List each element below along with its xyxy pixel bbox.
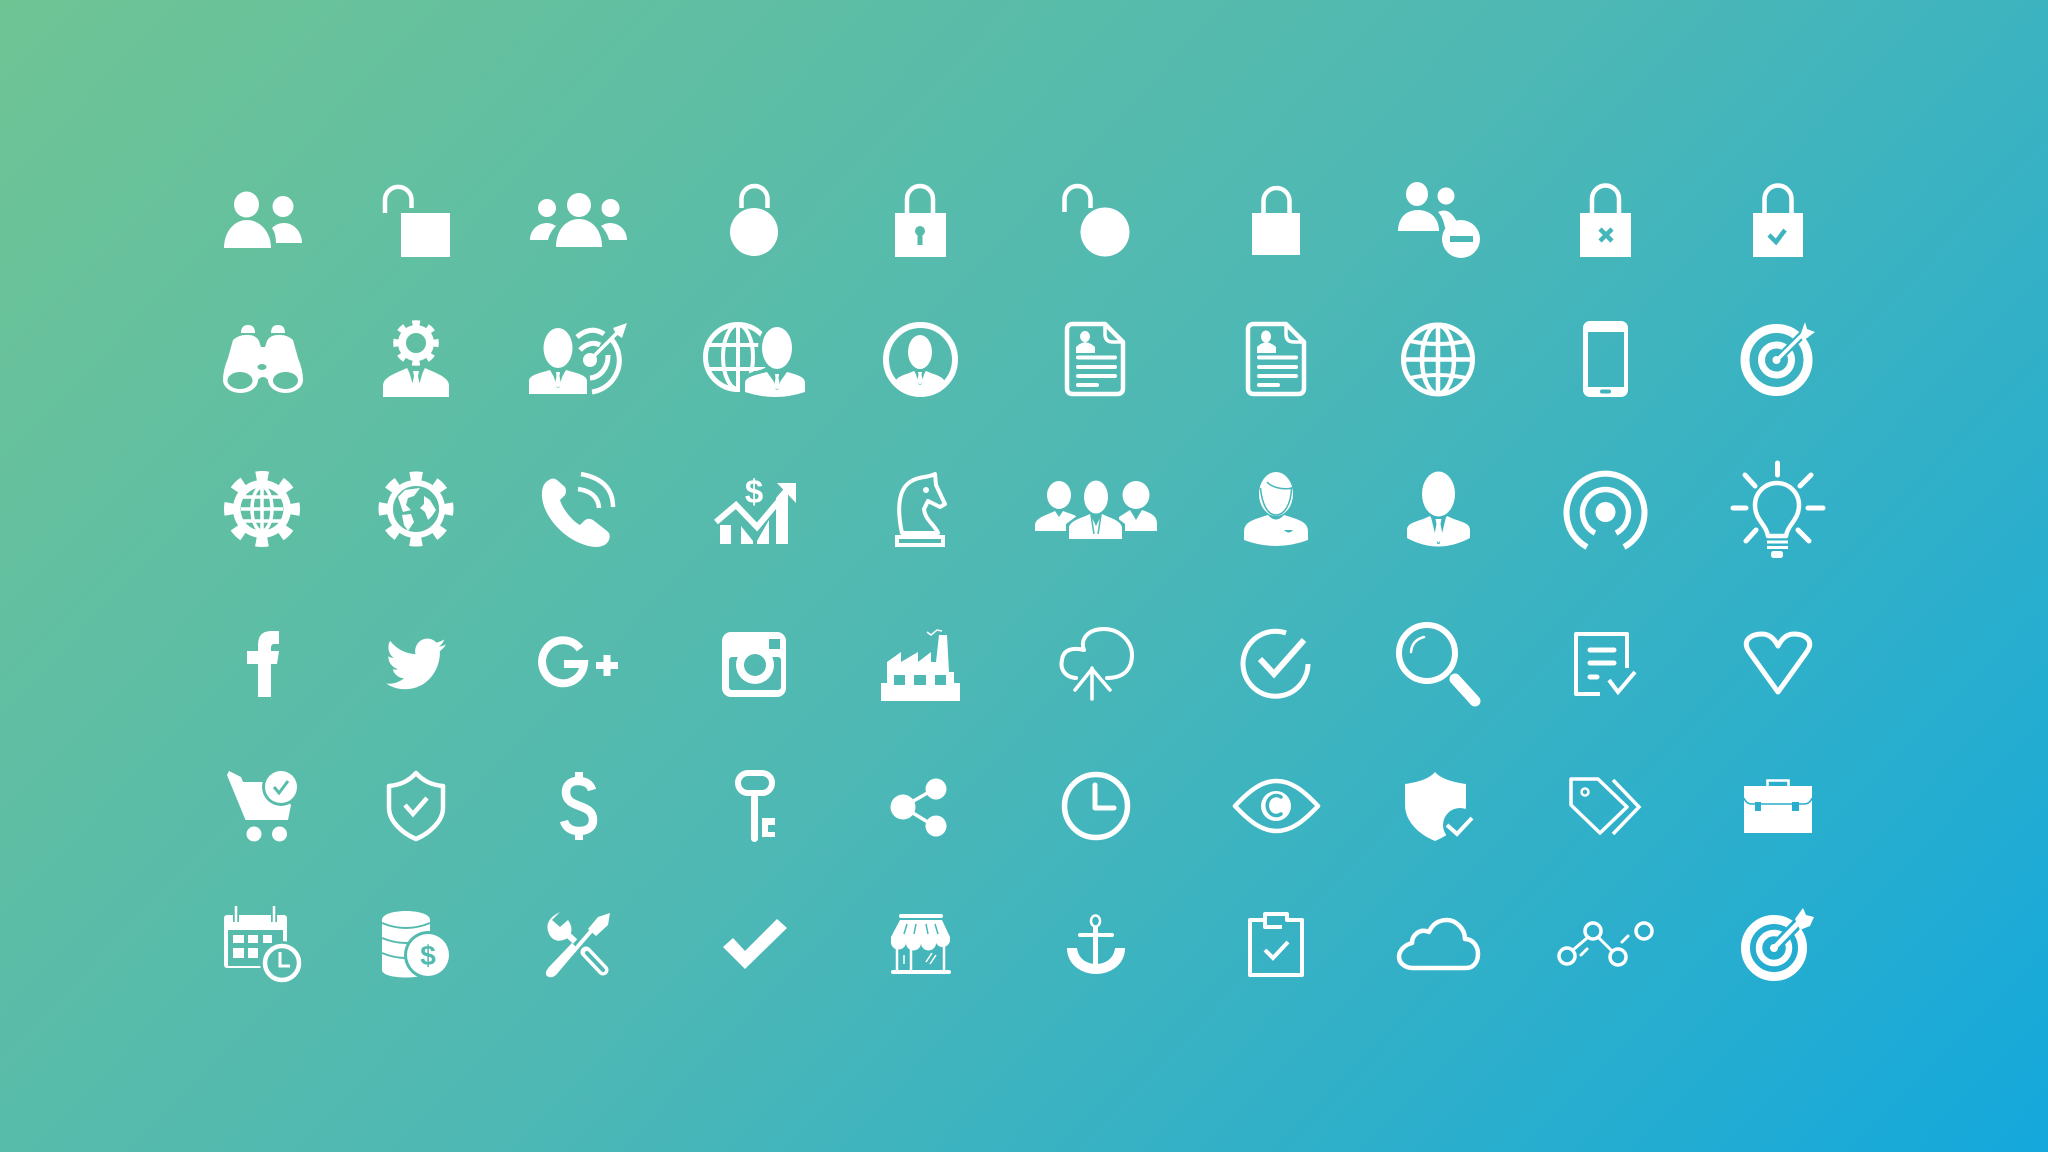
icon: clock (1064, 774, 1128, 838)
icon: factory (881, 630, 960, 701)
icon: circle check (1243, 631, 1308, 696)
icon: chess knight (897, 474, 945, 545)
icon: person with gear head (383, 323, 449, 397)
icon: round padlock (730, 186, 778, 256)
icon: magnifying glass (1399, 625, 1475, 701)
icon: padlock with cross (1580, 186, 1631, 257)
icon: phone with signal (542, 474, 613, 547)
icon: instagram (722, 632, 786, 697)
icon: anchor (1067, 916, 1125, 974)
icon: document with check (1576, 634, 1635, 694)
icon: cloud upload (1062, 629, 1132, 699)
icon: resume document male (1067, 324, 1123, 394)
icon: dollar sign (564, 772, 593, 840)
icon: growth chart with dollar: $ (745, 473, 763, 510)
icon: wireless signal (1566, 474, 1644, 547)
icon: target with arrow (1746, 908, 1814, 976)
icon: twitter (386, 639, 446, 689)
icon: wrench and screwdriver (546, 912, 610, 977)
icon: facebook (247, 631, 279, 697)
icon: padlock with keyhole (895, 186, 946, 257)
icon: light bulb (1733, 463, 1823, 558)
icon: heart (1746, 634, 1810, 692)
icon: coin stack with dollar: $ (420, 940, 436, 971)
icon: three business people (1035, 478, 1157, 542)
icon: share (890, 778, 946, 836)
icon: person in circle (886, 325, 955, 394)
icon: clipboard with check (1250, 914, 1302, 975)
icon: two people (224, 192, 302, 248)
icon: shield solid with check (1405, 772, 1477, 842)
icon: calendar with clock (224, 906, 304, 985)
icon: gear globe (229, 476, 295, 542)
icon: connected nodes line (1559, 923, 1652, 965)
icon: check mark (723, 919, 787, 969)
icon: cloud (1399, 920, 1478, 968)
icon: briefcase (1744, 780, 1812, 833)
icon: smartphone (1583, 321, 1628, 397)
icon: globe (1404, 325, 1472, 394)
icon: person with target (529, 323, 627, 394)
icon: person with tie (1407, 472, 1470, 546)
icon: open round padlock (1064, 186, 1130, 256)
icon: gear earth (383, 476, 449, 542)
icon: target with dart (1745, 322, 1815, 392)
icon: price tags (1571, 779, 1639, 834)
icon: storefront (891, 914, 951, 974)
icon: coin stack with dollar (382, 911, 452, 979)
icon: person with hair (1244, 472, 1308, 546)
icon: globe and person (706, 323, 810, 398)
icon: growth chart with dollar (716, 473, 796, 544)
icon: binoculars (223, 325, 303, 393)
icon: shopping cart with check (227, 768, 300, 842)
icon: open padlock (385, 187, 450, 257)
icon: people with minus (1398, 182, 1480, 258)
icon: eye (1235, 781, 1318, 831)
icon: shield outline with check (389, 773, 443, 839)
icon: key (738, 773, 775, 842)
icon: google plus (542, 640, 618, 683)
icon: plain padlock (1252, 188, 1300, 255)
icon: resume document female (1248, 324, 1304, 394)
icon: group of three (530, 193, 627, 247)
icon: padlock with check (1753, 186, 1803, 257)
